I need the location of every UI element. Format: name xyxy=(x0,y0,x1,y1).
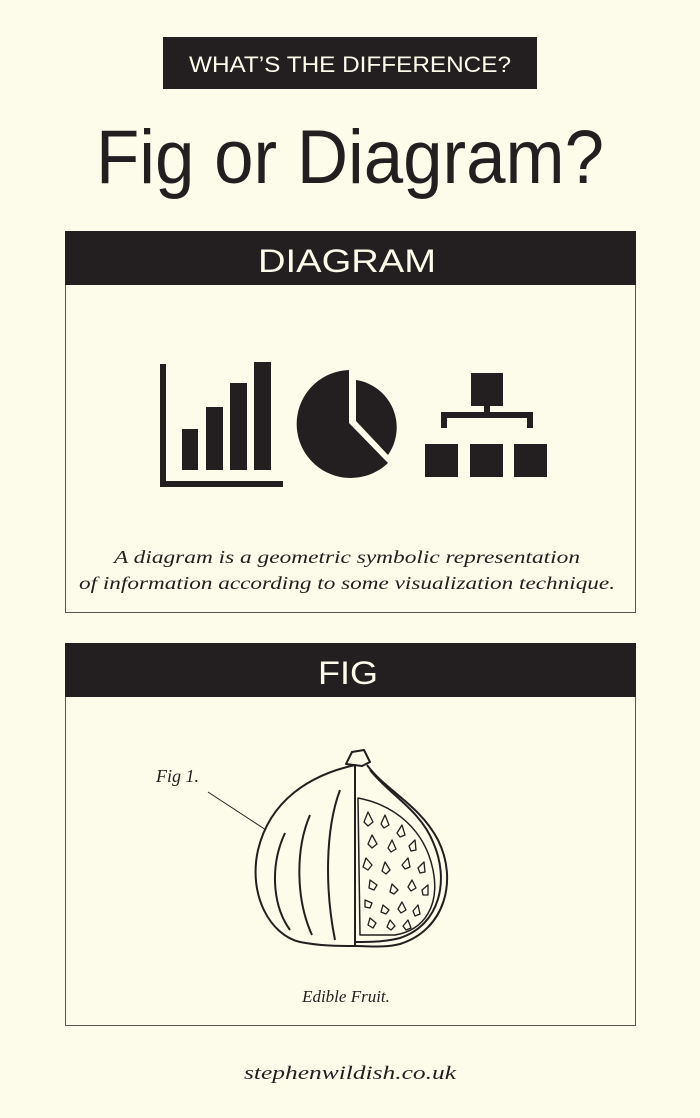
illustration: fig fruit xyxy=(256,750,447,946)
caption: edible fruit: Edible Fruit. xyxy=(301,987,390,1006)
icon: pie chart xyxy=(297,370,397,478)
heading: fig: FIG xyxy=(318,655,378,691)
icon: org chart xyxy=(425,373,547,477)
title: Fig or Diagram? xyxy=(96,115,604,200)
description text: of information according to some visualization technique. xyxy=(79,573,615,593)
panel: fig xyxy=(65,643,636,1026)
footer: website: stephenwildish.co.uk xyxy=(244,1063,457,1084)
badge: what's the difference: WHAT’S THE DIFFERENCE? xyxy=(189,52,511,77)
heading: fig xyxy=(65,643,636,697)
icon: bar chart xyxy=(160,362,283,487)
description text: A diagram is a geometric symbolic representation xyxy=(113,547,580,567)
badge: what's the difference xyxy=(163,37,537,89)
panel: diagram xyxy=(65,231,636,612)
heading: diagram xyxy=(65,231,636,285)
label: fig 1 xyxy=(155,766,266,830)
description text xyxy=(79,547,615,593)
heading: diagram: DIAGRAM xyxy=(258,243,436,279)
label: fig 1: Fig 1. xyxy=(155,766,199,786)
